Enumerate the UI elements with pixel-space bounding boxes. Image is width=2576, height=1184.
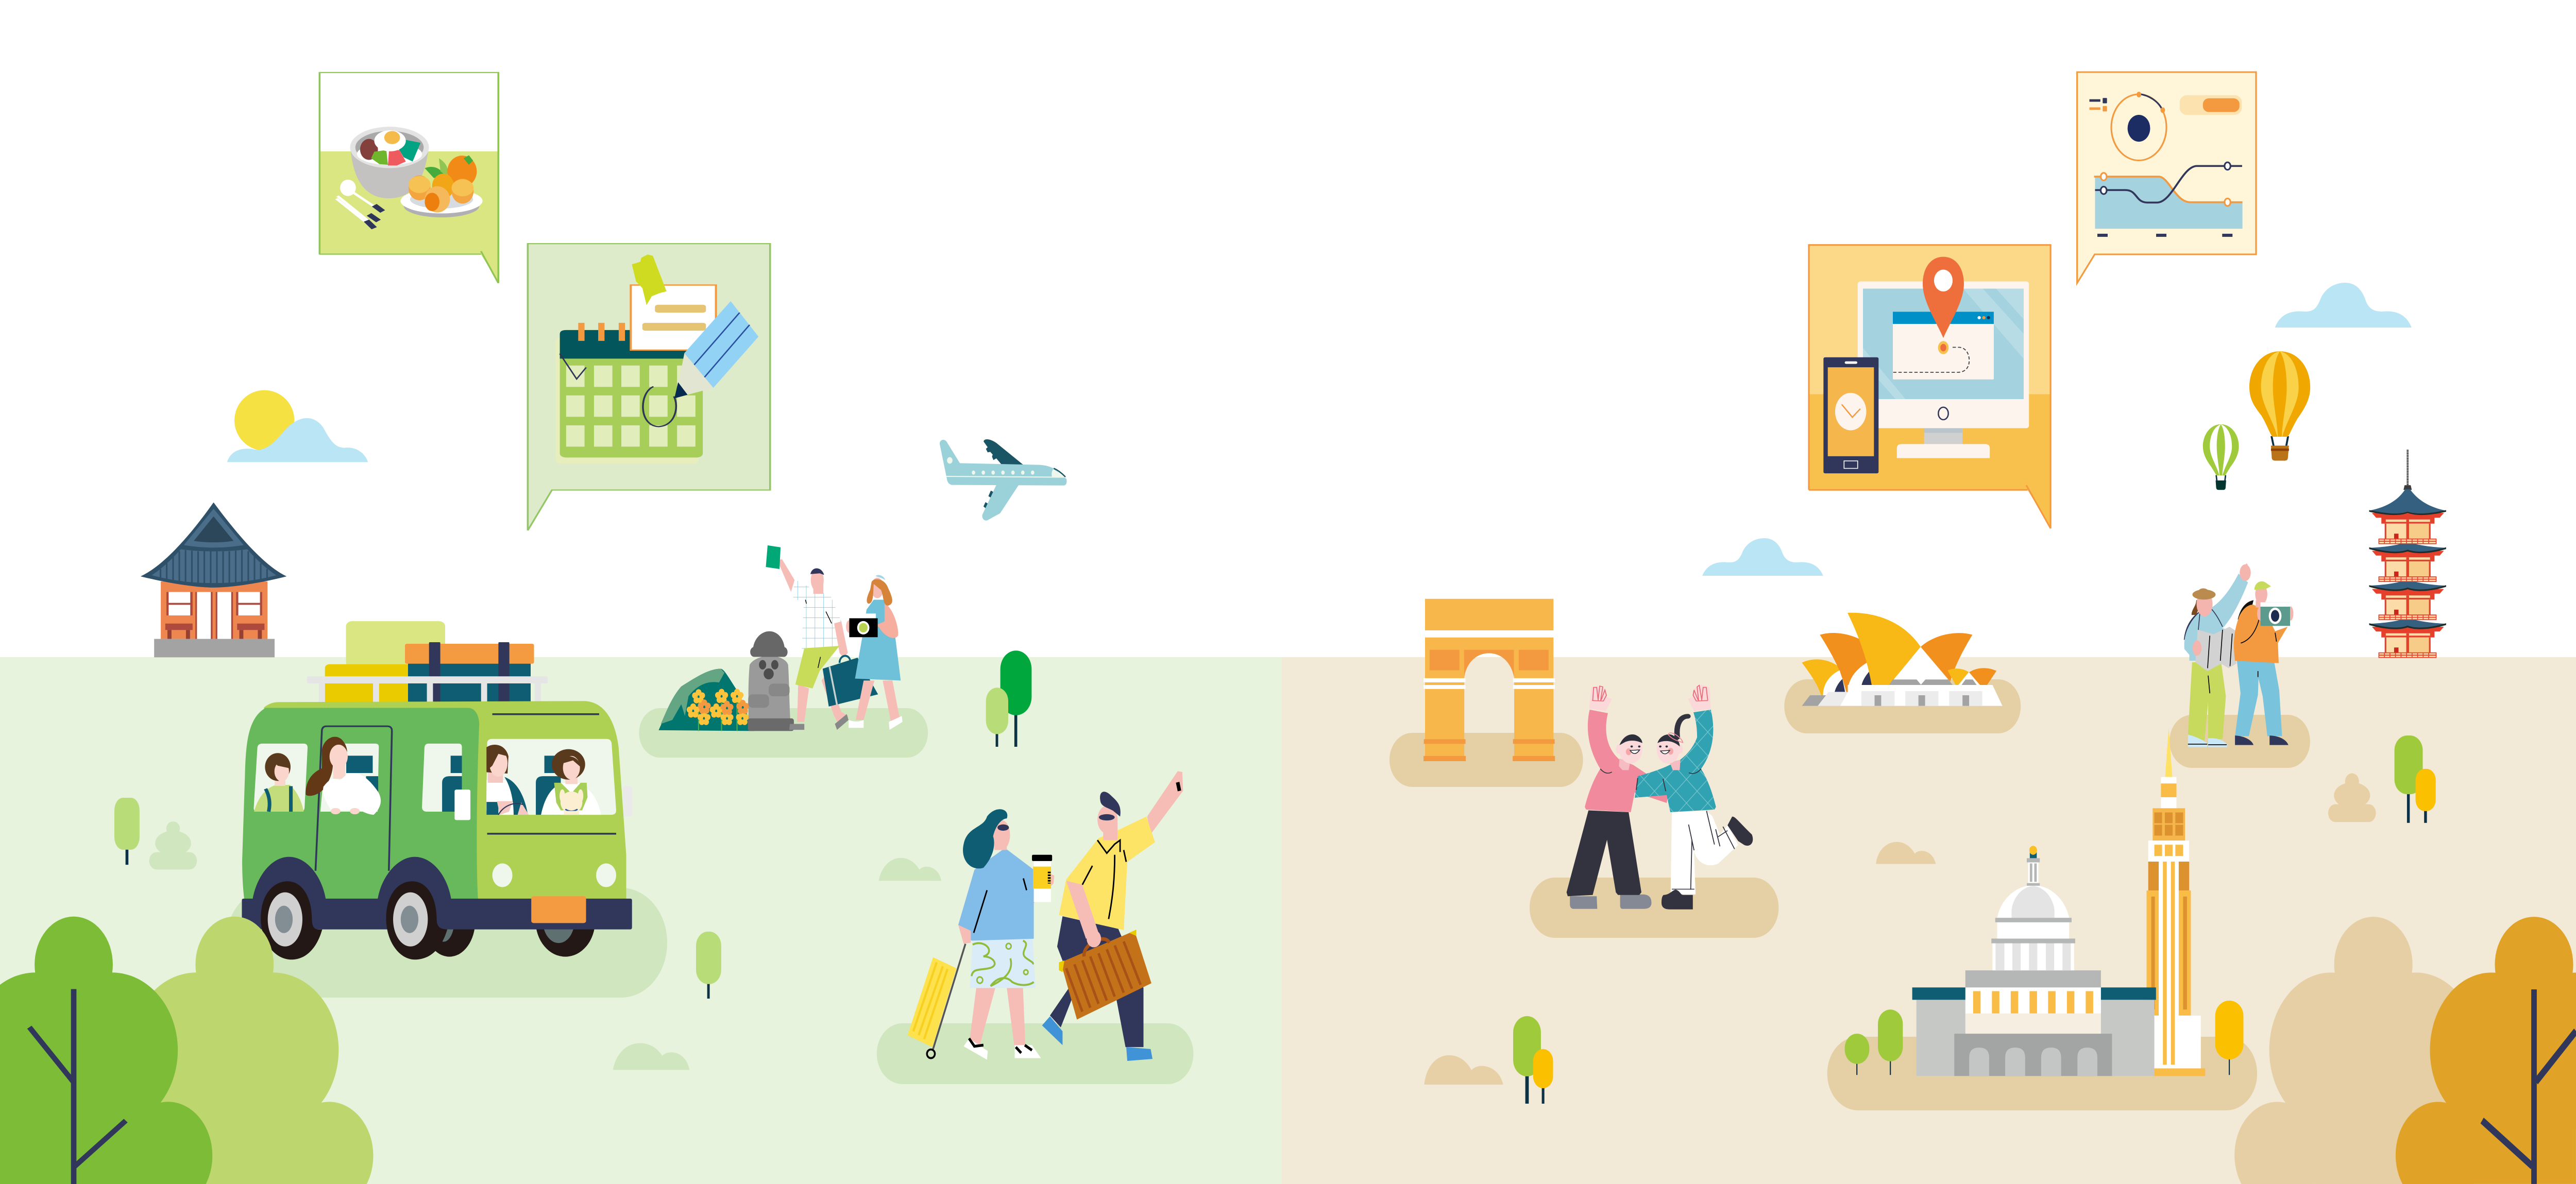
background: green field bbox=[0, 657, 1281, 1184]
icon: sun with cloud bbox=[227, 390, 368, 462]
cloud right lower bbox=[1702, 538, 1823, 576]
sydney opera house bbox=[1802, 613, 2003, 706]
background: beige field bbox=[1281, 657, 2576, 1184]
airplane bbox=[940, 439, 1066, 521]
line and area chart bbox=[2094, 162, 2243, 237]
hot air balloon: yellow bbox=[2249, 351, 2310, 460]
tourist man with plaid shirt bbox=[766, 545, 878, 730]
note paper bbox=[631, 254, 716, 350]
smartphone bbox=[1823, 357, 1878, 473]
bus body bbox=[242, 701, 632, 900]
dancing couple bbox=[1567, 685, 1753, 910]
speech bubble: route chart bbox=[2077, 72, 2256, 283]
bush left bbox=[149, 821, 197, 869]
woman in teal bbox=[1635, 685, 1753, 910]
speech bubble: map route on devices bbox=[1809, 245, 2050, 528]
walking woman with suitcase and coffee bbox=[908, 809, 1054, 1060]
tree: beige bush bottom-right bbox=[2234, 917, 2478, 1184]
toggle bbox=[2180, 95, 2242, 115]
bush cloud lower beige bbox=[1424, 1055, 1503, 1085]
front wheels bbox=[261, 881, 447, 959]
passenger: girl in hoodie bbox=[254, 753, 303, 812]
pill: bus ground bbox=[226, 888, 667, 998]
trees lower beige bbox=[1513, 1016, 1553, 1104]
trees and bushes: green field bbox=[613, 650, 1031, 1070]
walking man with briefcase bbox=[1042, 771, 1183, 1061]
man in pink bbox=[1567, 686, 1668, 909]
hot air balloon: green bbox=[2203, 424, 2239, 490]
tree: orange bottom-right bbox=[2396, 917, 2576, 1184]
tree: lime bush bottom-left bbox=[96, 917, 374, 1184]
icon: map pin bbox=[1923, 257, 1964, 338]
donut gauge bbox=[2111, 92, 2166, 160]
hikers: man with camera bbox=[2234, 581, 2293, 745]
cloud right upper bbox=[2275, 283, 2412, 328]
us capitol building bbox=[1912, 846, 2156, 1076]
calendar bbox=[555, 323, 703, 464]
rear wheels bbox=[423, 885, 595, 957]
speech bubble: schedule calendar bbox=[528, 244, 770, 530]
trees and cloud around capitol bbox=[1845, 842, 2243, 1075]
trees and bush right bbox=[2328, 735, 2436, 823]
hikers: woman with map bbox=[2184, 563, 2251, 747]
small tree left bbox=[114, 798, 140, 865]
speech bubble: Korean food bbox=[319, 72, 499, 283]
pill: opera house ground bbox=[1784, 679, 2021, 733]
tree: green bottom-left bbox=[0, 917, 212, 1184]
tour bus bbox=[242, 621, 632, 959]
pill: arch ground bbox=[1389, 733, 1583, 787]
roof luggage bbox=[307, 621, 548, 702]
tourist woman with camera bbox=[846, 575, 903, 730]
pill: capitol ground bbox=[1827, 1037, 2257, 1110]
legend bbox=[2090, 98, 2107, 111]
pill: dancing couple ground bbox=[1530, 878, 1778, 938]
passenger: woman at door bbox=[306, 737, 381, 815]
pill: walking couple ground bbox=[877, 1023, 1193, 1084]
red pagoda bbox=[2369, 450, 2446, 658]
passenger: woman with puppy bbox=[541, 749, 601, 815]
arc de triomphe bbox=[1423, 599, 1555, 761]
pill: hikers ground bbox=[2170, 715, 2310, 768]
jeju scene: hill, flowers, stone statue bbox=[658, 631, 794, 731]
hanok pavilion bbox=[141, 502, 286, 657]
passenger: driver bbox=[486, 745, 529, 815]
pill: jeju ground bbox=[639, 708, 928, 758]
empire state tower bbox=[2147, 728, 2205, 1076]
desktop monitor bbox=[1858, 282, 2029, 458]
bus chassis bbox=[242, 857, 632, 930]
pencil bbox=[674, 301, 758, 399]
